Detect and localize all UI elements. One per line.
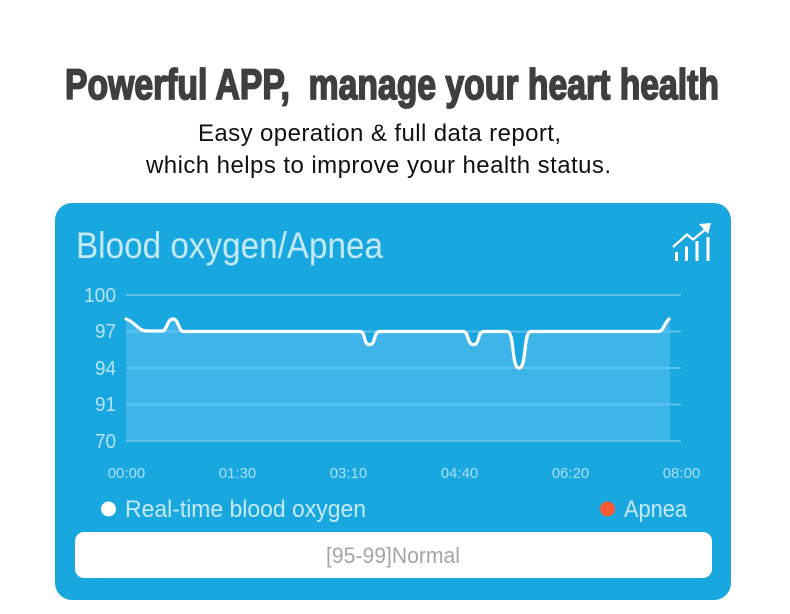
legend: apnea (600, 496, 688, 523)
y axis labels: 70 (95, 431, 116, 453)
x axis labels: 06:20 (552, 465, 589, 482)
panel: blood oxygen (55, 203, 731, 600)
data line (126, 319, 669, 368)
legend: apnea: Apnea (624, 496, 688, 523)
x axis labels: 03:10 (330, 465, 367, 482)
icon: rising chart (673, 223, 711, 261)
x axis labels: 04:40 (441, 465, 478, 482)
subtitle: which helps to improve your health status. (145, 152, 611, 179)
chart area fill (126, 319, 670, 441)
subtitle (145, 120, 611, 179)
status bar: [95-99]Normal (326, 543, 460, 568)
subtitle: Easy operation & full data report, (198, 120, 561, 147)
y axis labels: 91 (95, 394, 116, 416)
x axis labels: 01:30 (219, 465, 256, 482)
y axis labels (84, 285, 116, 453)
y axis labels: 97 (95, 321, 116, 343)
grid lines (126, 295, 681, 441)
x axis labels (108, 465, 700, 482)
y axis labels: 100 (84, 285, 116, 307)
panel heading: Blood oxygen/Apnea (76, 225, 383, 266)
y axis labels: 94 (95, 358, 116, 380)
line chart (84, 285, 700, 482)
x axis labels: 00:00 (108, 465, 145, 482)
x axis labels: 08:00 (663, 465, 700, 482)
status bar (75, 532, 712, 578)
legend: real-time blood oxygen: Real-time blood oxygen (125, 496, 366, 523)
